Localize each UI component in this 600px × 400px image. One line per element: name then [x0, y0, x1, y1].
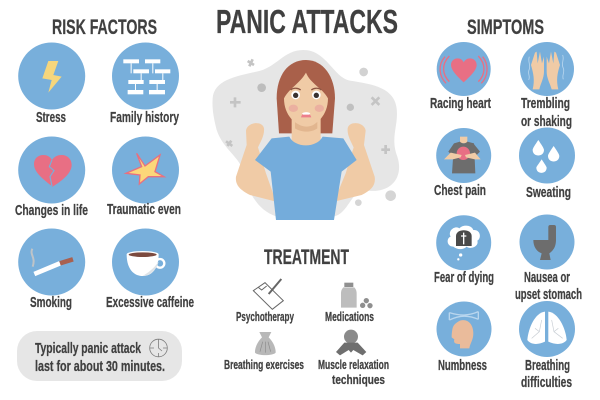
item: racing heart: Racing heart — [430, 96, 491, 112]
heading: simptoms: SIMPTOMS — [467, 16, 544, 39]
item: traumatic even — [107, 136, 181, 218]
heading: treatment: TREATMENT — [264, 246, 349, 269]
item: stress: Stress — [36, 110, 66, 126]
item: sweating — [519, 128, 575, 201]
item: psychotherapy: Psychotherapy — [236, 309, 294, 324]
item: smoking — [18, 228, 85, 311]
item: fear of dying: Fear of dying — [434, 270, 494, 286]
item: chest pain — [434, 128, 491, 199]
item: psychotherapy — [236, 279, 294, 324]
panel: treatment — [224, 246, 389, 387]
item: sweating: Sweating — [526, 185, 571, 201]
item: fear of dying — [434, 215, 494, 286]
item: chest pain: Chest pain — [434, 183, 486, 199]
background blob — [212, 50, 399, 217]
item: changes in life: Changes in life — [15, 203, 88, 219]
item: trembling or shaking: Trembling — [521, 96, 570, 112]
item: trembling or shaking — [520, 42, 574, 130]
item: smoking: Smoking — [30, 295, 72, 311]
item: family history — [110, 42, 179, 126]
item: muscle relaxation techniques — [318, 330, 389, 387]
item: stress — [18, 42, 85, 126]
item: breathing difficulties: difficulties — [521, 375, 572, 391]
callout: duration — [17, 331, 182, 381]
item: traumatic even: Traumatic even — [107, 202, 181, 218]
panel: symptoms — [430, 16, 582, 391]
item: excessive caffeine: Excessive caffeine — [106, 295, 194, 311]
item: changes in life — [15, 136, 88, 219]
item: numbness: Numbness — [438, 358, 487, 374]
item: breathing difficulties — [519, 301, 575, 391]
woman — [236, 60, 375, 220]
item: excessive caffeine — [106, 228, 194, 311]
item: family history: Family history — [110, 110, 179, 126]
item: medications: Medications — [325, 309, 374, 324]
item: breathing exercises: Breathing exercises — [224, 357, 304, 372]
callout: duration: Typically panic attack — [35, 341, 142, 357]
item: nausea or upset stomach: Nausea or — [524, 270, 570, 286]
item: medications — [325, 283, 374, 324]
item: breathing difficulties: Breathing — [525, 358, 570, 374]
item: muscle relaxation techniques: Muscle relaxation — [318, 357, 389, 372]
item: numbness — [436, 302, 492, 374]
item: breathing exercises — [224, 332, 304, 372]
item: trembling or shaking: or shaking — [521, 114, 572, 130]
panel: risk factors — [15, 16, 194, 381]
heading: risk factors: RISK FACTORS — [52, 16, 157, 39]
item: nausea or upset stomach — [515, 214, 582, 303]
panel: central figure — [212, 50, 399, 220]
decorative symbols — [226, 59, 396, 206]
title: PANIC ATTACKS — [216, 3, 398, 40]
item: racing heart — [430, 42, 491, 112]
callout: duration: last for about 30 minutes. — [35, 359, 165, 375]
item: muscle relaxation techniques: techniques — [332, 372, 385, 387]
icon: clock — [150, 339, 167, 357]
